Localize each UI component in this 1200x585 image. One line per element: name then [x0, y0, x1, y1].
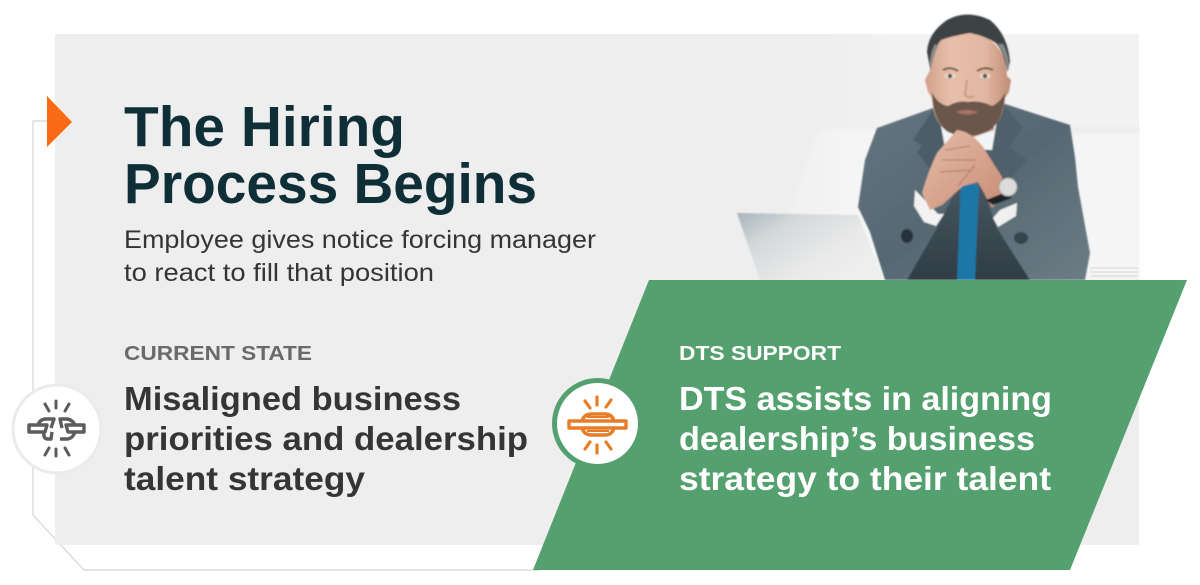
shirt: [940, 120, 997, 150]
panel: background: [55, 34, 1139, 545]
subtitle: to react to fill that position: [124, 259, 434, 287]
arrow: [47, 96, 72, 147]
tie: [957, 180, 979, 280]
jacket front opening: [907, 186, 1030, 280]
eyes: [943, 68, 993, 78]
beard: [932, 92, 1005, 136]
subtitle: Employee gives notice forcing manager: [124, 226, 596, 254]
current state label: CURRENT STATE: [124, 343, 312, 365]
current state text: priorities and dealership: [124, 420, 528, 457]
DTS support text: strategy to their talent: [679, 460, 1051, 497]
photo: businessman at laptop: [737, 14, 1090, 280]
neck: [942, 105, 996, 140]
DTS support text: DTS assists in aligning: [679, 380, 1052, 417]
current state text: [124, 380, 528, 497]
grey temples: [930, 44, 1009, 72]
current state text: talent strategy: [124, 460, 366, 497]
sleeve buttons: [901, 229, 913, 243]
laptop: [737, 213, 884, 280]
title: [124, 95, 537, 216]
hair: [927, 14, 1010, 72]
connector line: [33, 121, 540, 570]
left cuff: [914, 190, 944, 226]
clasped hands: [922, 130, 1002, 210]
icon: joined chain: [554, 380, 640, 466]
face: [925, 32, 1011, 136]
subtitle: [124, 226, 596, 287]
watch: [986, 178, 1017, 205]
title: Process Begins: [124, 152, 537, 216]
title: The Hiring: [124, 95, 405, 159]
nose: [965, 80, 974, 97]
DTS support text: [679, 380, 1052, 497]
lapels: [913, 110, 950, 195]
DTS support text: dealership’s business: [679, 420, 1035, 457]
right cuff: [993, 203, 1017, 227]
suit jacket: [858, 103, 1090, 280]
DTS support label: DTS SUPPORT: [679, 343, 841, 365]
photo: office background: [780, 34, 1139, 280]
icon: broken chain: [13, 385, 101, 473]
green panel: [533, 280, 1187, 570]
current state text: Misaligned business: [124, 380, 461, 417]
mouth: [956, 110, 978, 114]
